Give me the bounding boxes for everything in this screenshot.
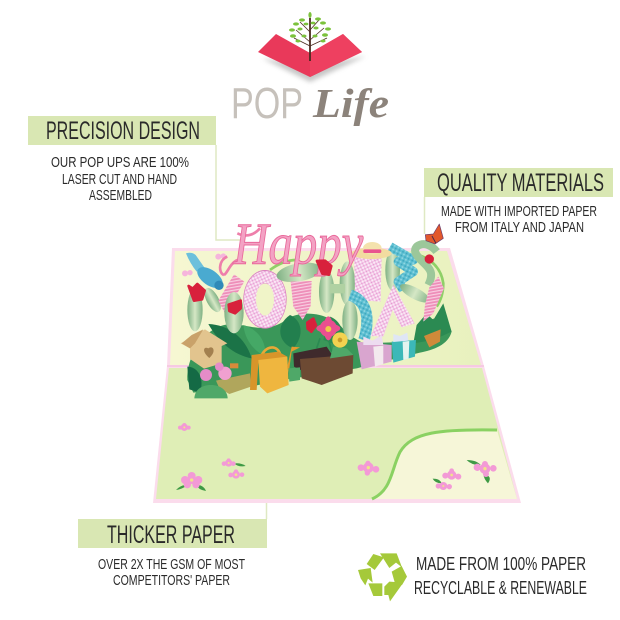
icon: tree on red open book bbox=[258, 12, 366, 82]
background foliage bbox=[187, 314, 452, 393]
callout: quality materials bbox=[424, 168, 613, 236]
text: precision description: LASER CUT AND HAND bbox=[62, 171, 177, 188]
text: recyclable statement bbox=[414, 553, 587, 598]
watering can bbox=[250, 347, 300, 393]
heading: thicker paper: THICKER PAPER bbox=[107, 521, 235, 549]
icon: recycling symbol bbox=[358, 553, 407, 601]
text: quality description bbox=[441, 203, 597, 236]
heading: precision design bbox=[28, 116, 216, 145]
basket with flowers bbox=[200, 362, 251, 394]
printed back panel details bbox=[270, 253, 443, 307]
letter: H bbox=[319, 249, 400, 313]
pink gift bbox=[357, 335, 392, 369]
letter: O bbox=[243, 270, 287, 329]
text: thicker description: OVER 2X THE GSM OF MOST bbox=[98, 556, 245, 573]
card lower panel bbox=[153, 366, 521, 503]
letter: R bbox=[342, 280, 432, 340]
title: Happy: Happy bbox=[233, 210, 364, 276]
letter: teal E bbox=[390, 247, 413, 290]
small orange planter bbox=[424, 329, 441, 347]
pop-up scene bbox=[181, 210, 452, 398]
teal gift bbox=[392, 333, 416, 363]
heading: precision design: PRECISION DESIGN bbox=[46, 117, 200, 145]
logo: Pop Life bbox=[231, 12, 389, 128]
brown planter bbox=[288, 347, 353, 385]
birdhouse bbox=[181, 329, 227, 369]
text: precision description: ASSEMBLED bbox=[89, 187, 152, 204]
pop-up card bbox=[153, 210, 521, 503]
letter: T bbox=[275, 260, 323, 320]
text: thicker description bbox=[98, 556, 245, 589]
tulips bbox=[189, 256, 433, 332]
printed flowers on lower panel bbox=[176, 423, 497, 491]
heading: thicker paper bbox=[78, 519, 267, 549]
letter: M bbox=[187, 274, 244, 333]
text: precision description: OUR POP UPS ARE 100% bbox=[51, 154, 189, 171]
letter: S bbox=[413, 244, 452, 343]
hat bbox=[352, 242, 392, 259]
planter flowers bbox=[316, 316, 353, 358]
callout: thicker paper bbox=[78, 519, 267, 589]
wordmark POP: POP bbox=[231, 79, 303, 128]
card back panel bbox=[167, 248, 484, 366]
connector lines bbox=[216, 145, 424, 519]
text: precision description bbox=[51, 154, 189, 204]
callout: precision design bbox=[28, 116, 216, 204]
bird bbox=[186, 253, 226, 292]
wordmark Life: Life bbox=[312, 80, 389, 126]
text: thicker description: COMPETITORS' PAPER bbox=[113, 572, 230, 589]
green dome bbox=[194, 385, 228, 398]
butterfly bbox=[425, 224, 443, 244]
